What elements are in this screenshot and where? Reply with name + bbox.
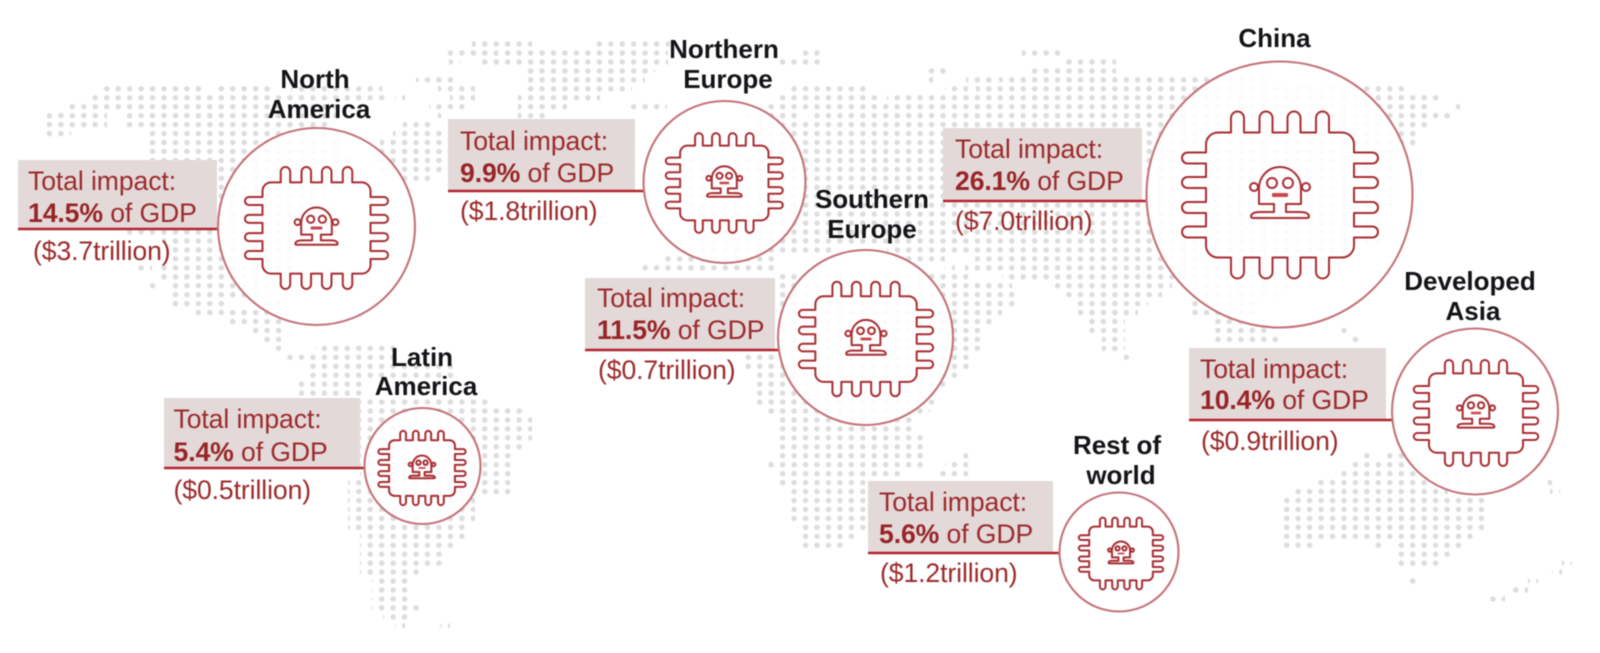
region name: Rest of <box>1073 430 1161 460</box>
leader line <box>943 200 1147 202</box>
impact box <box>1189 348 1386 419</box>
icon: robot chip <box>1414 360 1538 466</box>
region name: Europe <box>827 214 917 244</box>
region: Developed Asia <box>1189 266 1558 494</box>
region: Northern Europe <box>448 34 806 263</box>
impact text: ($0.5trillion) <box>174 475 311 505</box>
impact box <box>868 481 1053 552</box>
region name: America <box>268 94 371 124</box>
impact text: of GDP <box>670 315 764 345</box>
bubble <box>1146 62 1412 328</box>
impact text: of GDP <box>939 519 1033 549</box>
region: China <box>943 23 1412 328</box>
region name: Europe <box>683 64 773 94</box>
icon: robot chip <box>666 133 783 233</box>
leader line <box>18 228 219 230</box>
impact text: ($7.0trillion) <box>955 206 1093 236</box>
impact box <box>585 278 775 349</box>
leader line <box>868 552 1060 554</box>
region: Southern Europe <box>585 184 953 425</box>
impact text: Total impact: <box>28 166 176 196</box>
bubble <box>364 408 480 524</box>
impact text: of GDP <box>103 198 197 228</box>
leader line <box>585 349 779 351</box>
bubble <box>1060 492 1178 612</box>
impact box <box>18 160 217 228</box>
region name: world <box>1085 460 1156 490</box>
impact text: ($0.7trillion) <box>598 355 736 385</box>
icon: robot chip <box>378 431 466 505</box>
region name: North <box>280 64 350 94</box>
impact text: 5.4% <box>174 437 234 467</box>
impact text: ($1.2trillion) <box>880 558 1018 588</box>
impact text: of GDP <box>1275 385 1369 415</box>
impact text: Total impact: <box>955 134 1103 164</box>
leader line <box>448 190 644 192</box>
impact box <box>448 119 635 190</box>
impact text: 5.6% <box>879 519 939 549</box>
impact text: 26.1% <box>955 166 1030 196</box>
impact text: of GDP <box>234 437 328 467</box>
region: Latin America <box>164 342 480 524</box>
impact text: of GDP <box>1030 166 1124 196</box>
bubble <box>778 250 953 425</box>
region name: Developed <box>1404 266 1536 296</box>
impact text: ($1.8trillion) <box>460 196 598 226</box>
impact text: Total impact: <box>597 283 745 313</box>
bubble <box>1392 328 1558 494</box>
leader line <box>1189 419 1393 421</box>
region name: America <box>375 371 478 401</box>
region name: Southern <box>815 184 929 214</box>
impact text: ($3.7trillion) <box>33 236 171 266</box>
bubble <box>644 101 806 263</box>
region: Rest of world <box>868 430 1178 612</box>
impact box <box>164 398 360 467</box>
impact text: Total impact: <box>174 404 321 434</box>
impact text: of GDP <box>520 158 614 188</box>
impact text: ($0.9trillion) <box>1201 426 1339 456</box>
region: North America <box>18 64 415 325</box>
icon: robot chip <box>245 167 388 289</box>
impact text: Total impact: <box>1200 354 1348 384</box>
icon: robot chip <box>1182 112 1378 278</box>
icon: robot chip <box>799 282 933 396</box>
region name: Latin <box>391 342 453 372</box>
icon: robot chip <box>1079 518 1163 589</box>
bubble <box>218 128 415 325</box>
impact text: 11.5% <box>597 315 670 345</box>
impact text: Total impact: <box>879 487 1027 517</box>
region name: China <box>1238 23 1311 53</box>
impact text: 10.4% <box>1200 385 1275 415</box>
region name: Northern <box>669 34 779 64</box>
region name: Asia <box>1446 296 1501 326</box>
impact box <box>943 128 1142 200</box>
impact text: Total impact: <box>460 126 608 156</box>
leader line <box>164 467 365 469</box>
impact text: 14.5% <box>28 198 103 228</box>
impact text: 9.9% <box>460 158 520 188</box>
